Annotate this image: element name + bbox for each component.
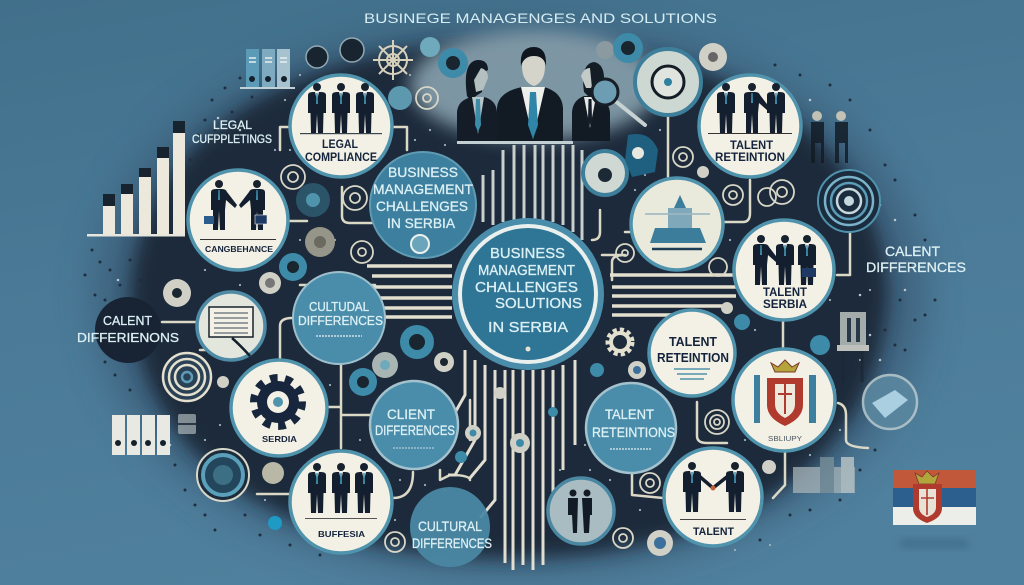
panel: cultural differences upper: DIFFERENCES	[298, 314, 383, 328]
panel: talent differences dark label	[77, 297, 179, 363]
text: legal outside label: LEGAL	[213, 120, 253, 132]
bar chart	[87, 121, 185, 236]
panel: client differences: CLIENT	[387, 407, 435, 422]
panel: cultural differences upper: CULTUDAL	[309, 300, 369, 314]
horizontal stripes left	[367, 266, 452, 317]
panel: top lens circle	[635, 49, 701, 115]
panel: central hub: CHALLENGES	[475, 280, 578, 296]
panel: central hub: BUSINESS	[490, 246, 565, 262]
icon: executives group	[457, 47, 610, 141]
panel: business management blue circle: MANAGEMENT	[373, 181, 473, 197]
panel: talent retentions blue: RETEINTIONS	[592, 425, 675, 440]
panel: gear	[231, 360, 327, 456]
panel: cultural differences lower: DIFFERENCES	[412, 536, 492, 551]
panel: client differences	[370, 381, 458, 469]
text: calent differences right: CALENT	[885, 243, 940, 259]
icon: faded executives right	[811, 111, 848, 163]
panel: gear: SERDIA	[262, 434, 297, 444]
icon: faded device	[178, 414, 196, 434]
panel: two persons circle	[548, 478, 614, 544]
panel: coat of arms circle: SBLIUPY	[768, 434, 802, 443]
panel: document circle	[197, 292, 265, 360]
small ring icons	[163, 33, 830, 556]
panel: talent handshake: TALENT	[693, 526, 734, 538]
icon: spiral left	[163, 353, 211, 401]
panel: three persons lower	[290, 451, 392, 553]
icon: binders bottom	[112, 415, 170, 455]
center man	[497, 47, 563, 141]
title: BUSINEGE MANAGENGES AND SOLUTIONS	[364, 10, 717, 26]
panel: talent retentions blue: TALENT	[605, 407, 654, 422]
panel: central hub: MANAGEMENT	[478, 263, 575, 279]
fine detail dots in the dark field	[205, 75, 870, 550]
panel: central hub: IN SERBIA	[488, 320, 568, 336]
icon: magnifier	[592, 79, 645, 125]
panel: talent retentions blue	[586, 383, 676, 473]
left woman	[457, 60, 497, 141]
blurred caption under flag	[900, 539, 968, 548]
text: legal outside label	[192, 120, 272, 146]
icon: dark teal badge	[625, 134, 658, 177]
panel: legal compliance: LEGAL	[322, 139, 358, 151]
panel: cultural differences upper	[293, 272, 385, 364]
speckles	[85, 65, 935, 555]
horizontal stripes right	[610, 275, 737, 315]
panel: legal compliance: COMPLIANCE	[305, 152, 377, 164]
panel: talent serbia: SERBIA	[763, 299, 807, 311]
icon: faded office	[793, 457, 855, 493]
panel: talent serbia: TALENT	[763, 287, 807, 299]
dark blob fringe	[95, 24, 925, 574]
panel: legal compliance	[290, 75, 392, 177]
panel: business management blue circle: BUSINESS	[388, 164, 458, 180]
icon: spiral right	[818, 170, 880, 232]
panel: talent retention small: RETEINTION	[657, 351, 729, 365]
panel: talent retention top: RETEINTION	[715, 152, 785, 164]
dark central network field	[130, 42, 888, 558]
panel: central hub: SOLUTIONS	[495, 296, 582, 312]
panel: handshake: CANGBEHANCE	[205, 244, 273, 254]
icon: cream gear	[608, 330, 632, 354]
panel: talent retention top	[699, 75, 801, 177]
vertical stripes above hub	[483, 145, 582, 240]
right woman	[572, 62, 610, 141]
panel: coat of arms circle	[733, 349, 835, 451]
panel: grey circle with teal ring	[583, 151, 627, 195]
panel: business management blue circle	[370, 152, 476, 258]
icon: serbian flag	[893, 470, 976, 525]
light haze behind executives	[410, 30, 660, 140]
text: legal outside label: CUFPPLETINGS	[192, 134, 272, 146]
panel: client differences: DIFFERENCES	[375, 423, 455, 438]
podium bar	[457, 141, 573, 144]
panel: central hub	[452, 218, 604, 370]
icon: ship wheel	[373, 40, 413, 80]
panel: cultural differences lower: CULTURAL	[418, 519, 482, 534]
icon: faded building right	[837, 312, 869, 382]
panel: talent retention small	[649, 310, 735, 396]
icon: teal gauge circle	[197, 449, 249, 501]
panel: talent handshake	[664, 448, 762, 546]
panel: handshake	[188, 170, 288, 270]
panel: business management blue circle: CHALLENGES	[376, 198, 468, 214]
icon: glass lens right	[863, 375, 917, 429]
panel: cultural differences lower	[410, 487, 492, 567]
panel: business management blue circle: IN SERBIA	[387, 215, 456, 231]
panel: talent retention top: TALENT	[730, 140, 773, 152]
vertical stripes below hub	[448, 350, 575, 570]
panel: talent differences dark label: DIFFERIENONS	[77, 330, 179, 345]
text: calent differences right	[866, 243, 966, 275]
icon: binders top	[240, 49, 295, 89]
text: calent differences right: DIFFERENCES	[866, 259, 966, 275]
panel: institution building	[631, 178, 723, 270]
connector lines	[162, 116, 868, 498]
panel: talent serbia	[734, 220, 834, 320]
panel: three persons lower: BUFFESIA	[318, 529, 365, 539]
panel: talent retention small: TALENT	[669, 335, 717, 349]
panel: talent differences dark label: CALENT	[103, 313, 152, 328]
